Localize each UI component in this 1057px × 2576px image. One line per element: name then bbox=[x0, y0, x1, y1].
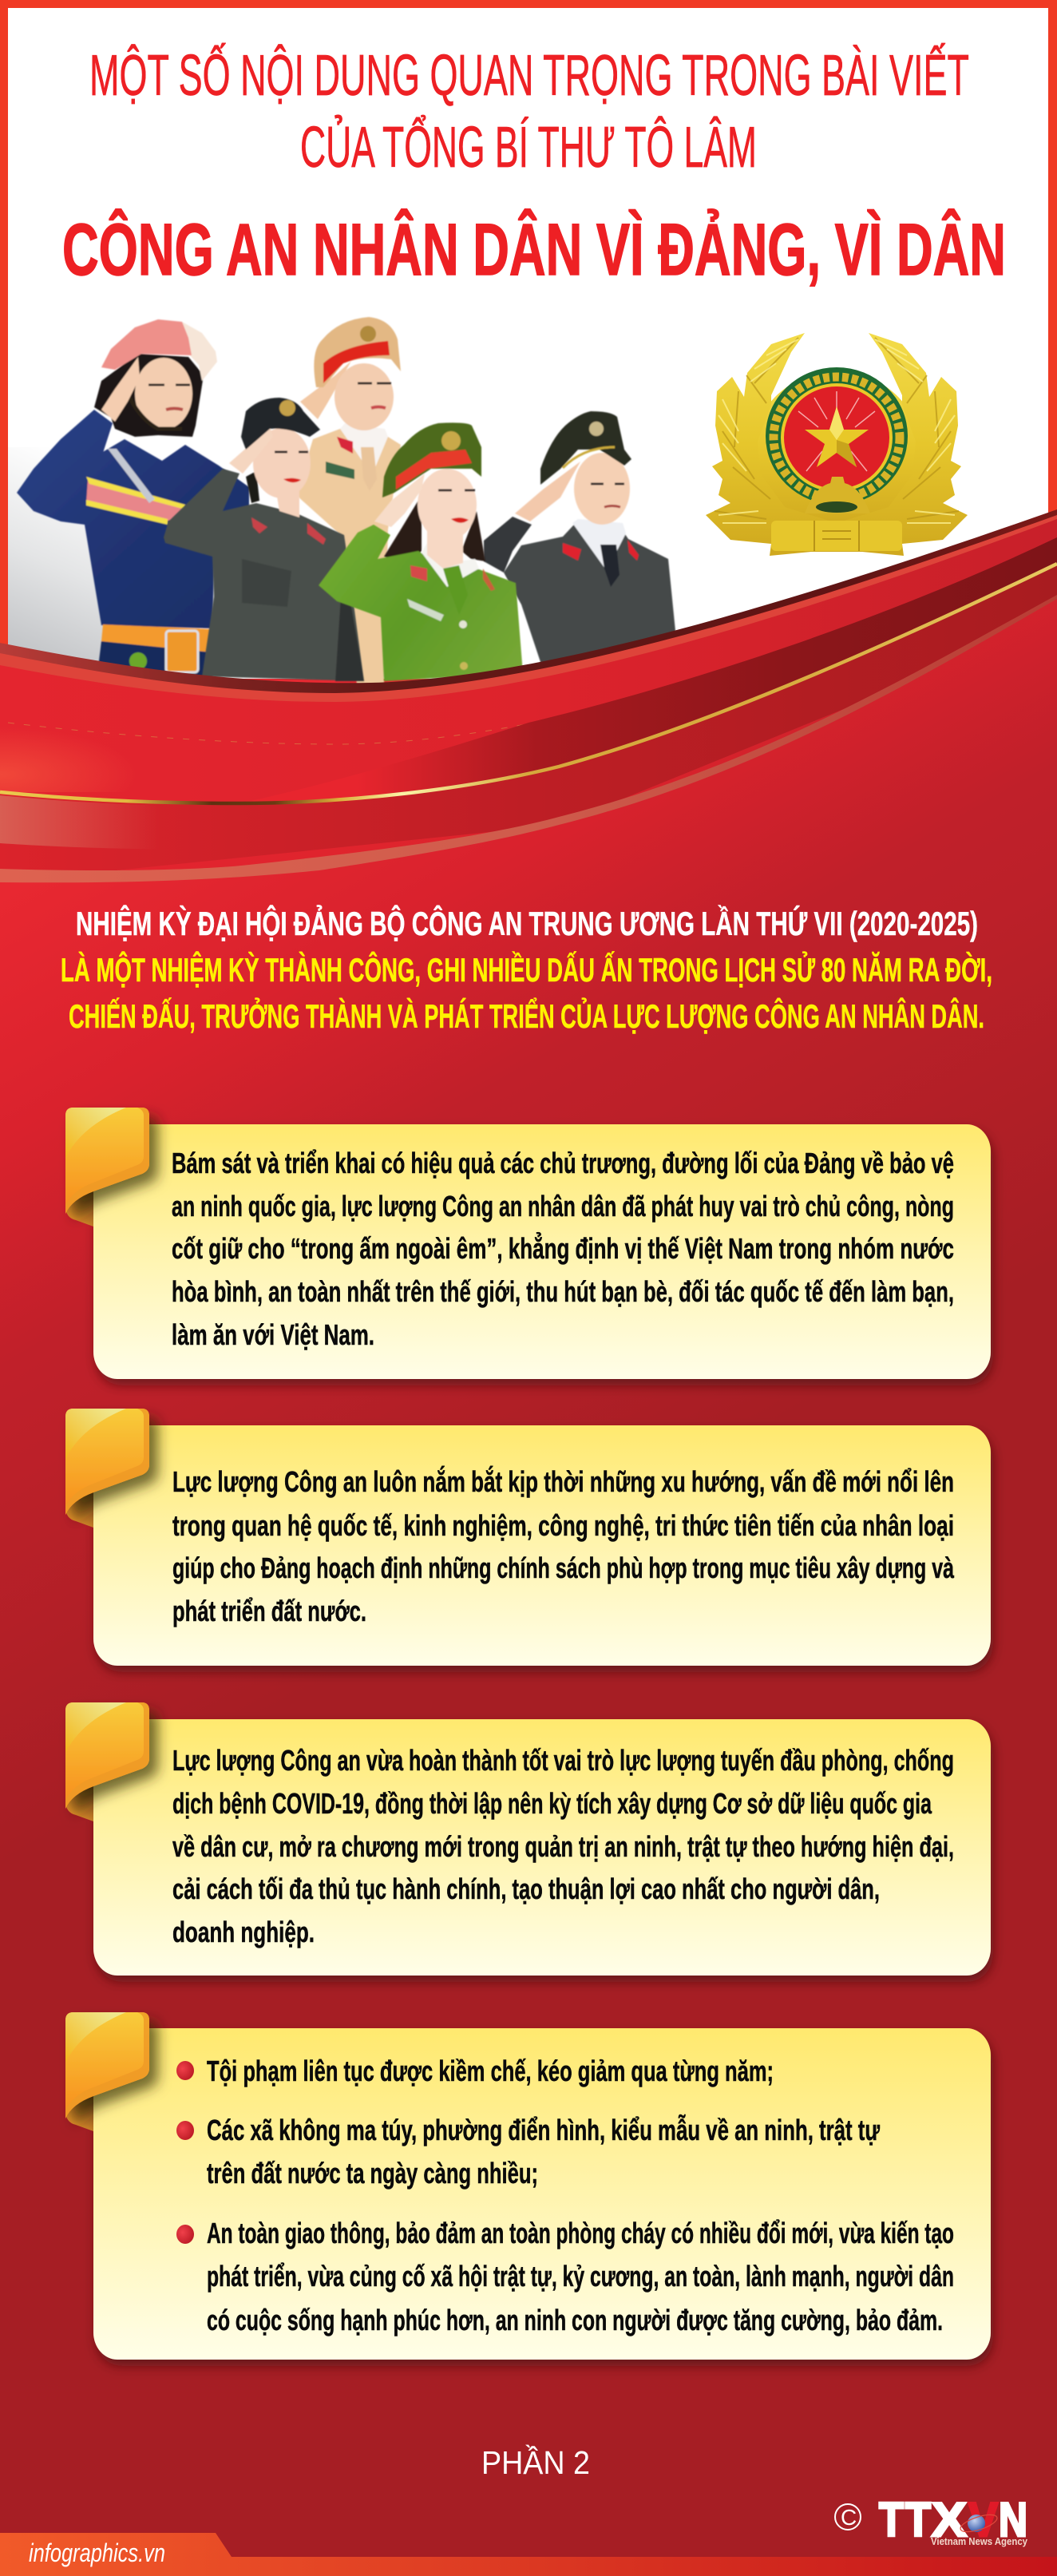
panel: card 4 bbox=[65, 2012, 991, 2360]
logo: TTXVN: Vietnam News Agency bbox=[931, 2535, 1028, 2547]
ribbon swoosh bbox=[0, 509, 1057, 966]
frame: orange border bbox=[0, 0, 1057, 648]
icon: folded ribbon 4 bbox=[65, 2012, 149, 2131]
gold line bbox=[0, 564, 1057, 803]
intro text bbox=[61, 904, 992, 1035]
bullet 3 bbox=[176, 2225, 194, 2244]
icon: folded ribbon 2 bbox=[65, 1409, 149, 1528]
panel: card 3 bbox=[65, 1702, 991, 1976]
card 3 text bbox=[172, 1744, 954, 1948]
icon: folded ribbon 1 bbox=[65, 1108, 149, 1227]
logo: TTXVN: N bbox=[999, 2493, 1027, 2546]
card 4 text bbox=[207, 2055, 954, 2336]
icon: folded ribbon 3 bbox=[65, 1702, 149, 1821]
figure: woman in green uniform bbox=[319, 422, 523, 681]
footer bar bbox=[0, 2533, 1057, 2576]
figure: traffic police officer bbox=[296, 317, 401, 687]
panel: card 1 bbox=[65, 1108, 991, 1379]
heading: top lines: CỦA TỔNG BÍ THƯ TÔ LÂM bbox=[300, 115, 757, 180]
card 2 text bbox=[172, 1464, 955, 1627]
card 1 text bbox=[172, 1147, 954, 1351]
footer website: infographics.vn bbox=[29, 2538, 165, 2567]
panel: card 2 bbox=[65, 1409, 991, 1666]
emblem: public security badge bbox=[706, 333, 968, 556]
bullet 1 bbox=[176, 2061, 194, 2080]
bullet 2 bbox=[176, 2121, 194, 2140]
figure: firefighter bbox=[17, 319, 249, 695]
logo: TTXVN: C bbox=[841, 2505, 857, 2530]
card 3 text: doanh nghiệp. bbox=[172, 1916, 315, 1948]
logo: TTXVN: X bbox=[932, 2493, 967, 2546]
part label: PHẦN 2 bbox=[481, 2444, 590, 2481]
card 1 text: làm ăn với Việt Nam. bbox=[172, 1318, 374, 1351]
card 4 text: trên đất nước ta ngày càng nhiều; bbox=[207, 2157, 538, 2190]
card 2 text: phát triển đất nước. bbox=[172, 1595, 366, 1627]
white header panel bbox=[8, 8, 1048, 679]
figure: man in dark uniform bbox=[484, 411, 677, 669]
logo: TTXVN: V bbox=[968, 2493, 998, 2546]
logo: TTXVN: T bbox=[879, 2493, 904, 2546]
figure: woman in black uniform bbox=[164, 398, 364, 681]
card 4 text: Tội phạm liên tục được kiềm chế, kéo giảm qua từng năm; bbox=[207, 2055, 774, 2087]
logo: TTXVN: T bbox=[905, 2493, 931, 2546]
heading: top lines bbox=[89, 42, 969, 180]
logo: TTXVN bbox=[835, 2493, 1028, 2547]
